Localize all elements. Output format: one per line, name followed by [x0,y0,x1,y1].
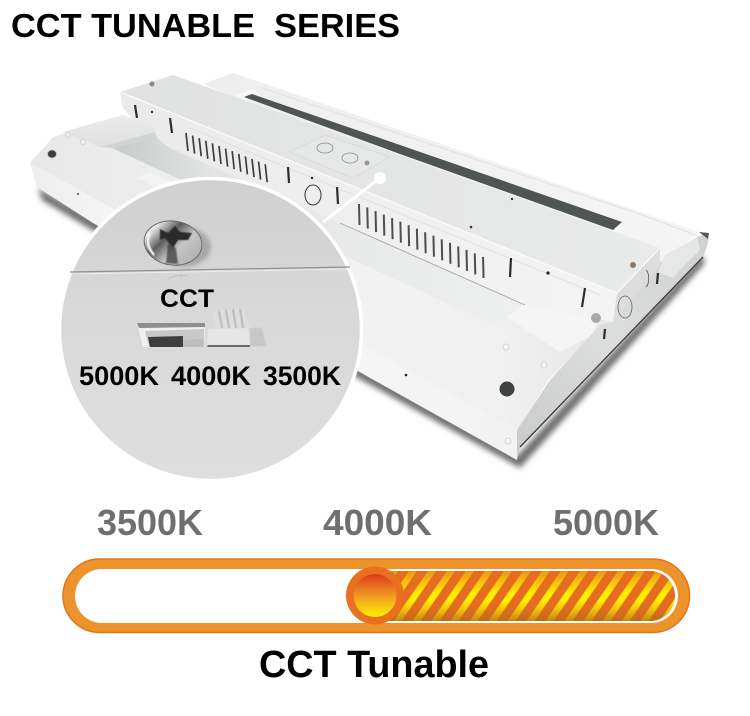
slider knob [346,566,404,624]
colour temperature labels: 4000K [323,502,432,543]
switch position labels [79,361,341,391]
face fold line [190,128,600,295]
back plate inner line [262,88,698,236]
driver box face [120,92,617,322]
end step [507,292,600,352]
magnifier disc [60,178,362,480]
switch position labels: 5000K [79,361,159,391]
junction plate [290,135,390,178]
screw [141,217,211,269]
driver box top [120,75,660,293]
driver box end [613,248,660,322]
right side edge line [520,257,703,447]
slot end [616,217,630,236]
dark slot opening [244,94,622,230]
mounting slots [135,105,658,339]
right side panel [517,233,709,460]
fixture shadow [38,188,705,468]
driver box edge [120,92,660,293]
ventilation slots left [186,133,267,182]
ventilation slots right [359,204,484,278]
switch position labels: 4000K [171,361,251,391]
slide switch [137,308,266,347]
lens recess [112,135,525,328]
title: CCT TUNABLE SERIES [11,7,400,44]
seam line [70,267,350,279]
callout dot [374,172,386,184]
corner tip [699,232,709,239]
slider inner white [75,569,678,623]
CCT slider [63,559,690,632]
caption: CCT Tunable [259,644,489,686]
face bottom line [340,223,525,305]
lens highlight [136,172,340,270]
main top surface [30,115,617,430]
switch position labels: 3500K [263,361,341,391]
label: CCT: CCT [160,285,214,313]
wing cover lip [100,132,157,148]
colour temperature labels [97,502,659,543]
magnified CCT switch detail [60,178,362,480]
front face [30,163,517,460]
back plate [203,73,700,262]
slot notch [235,88,260,101]
holes and screws [48,82,636,444]
colour temperature labels: 3500K [97,502,203,543]
striped fill [370,571,680,621]
callout pointer line [323,178,380,222]
side highlight [658,237,700,278]
wing cover [63,115,155,147]
slider track [63,559,690,632]
colour temperature labels: 5000K [553,502,659,543]
product photo: LED high bay fixture [30,73,709,468]
knockouts [305,143,649,318]
